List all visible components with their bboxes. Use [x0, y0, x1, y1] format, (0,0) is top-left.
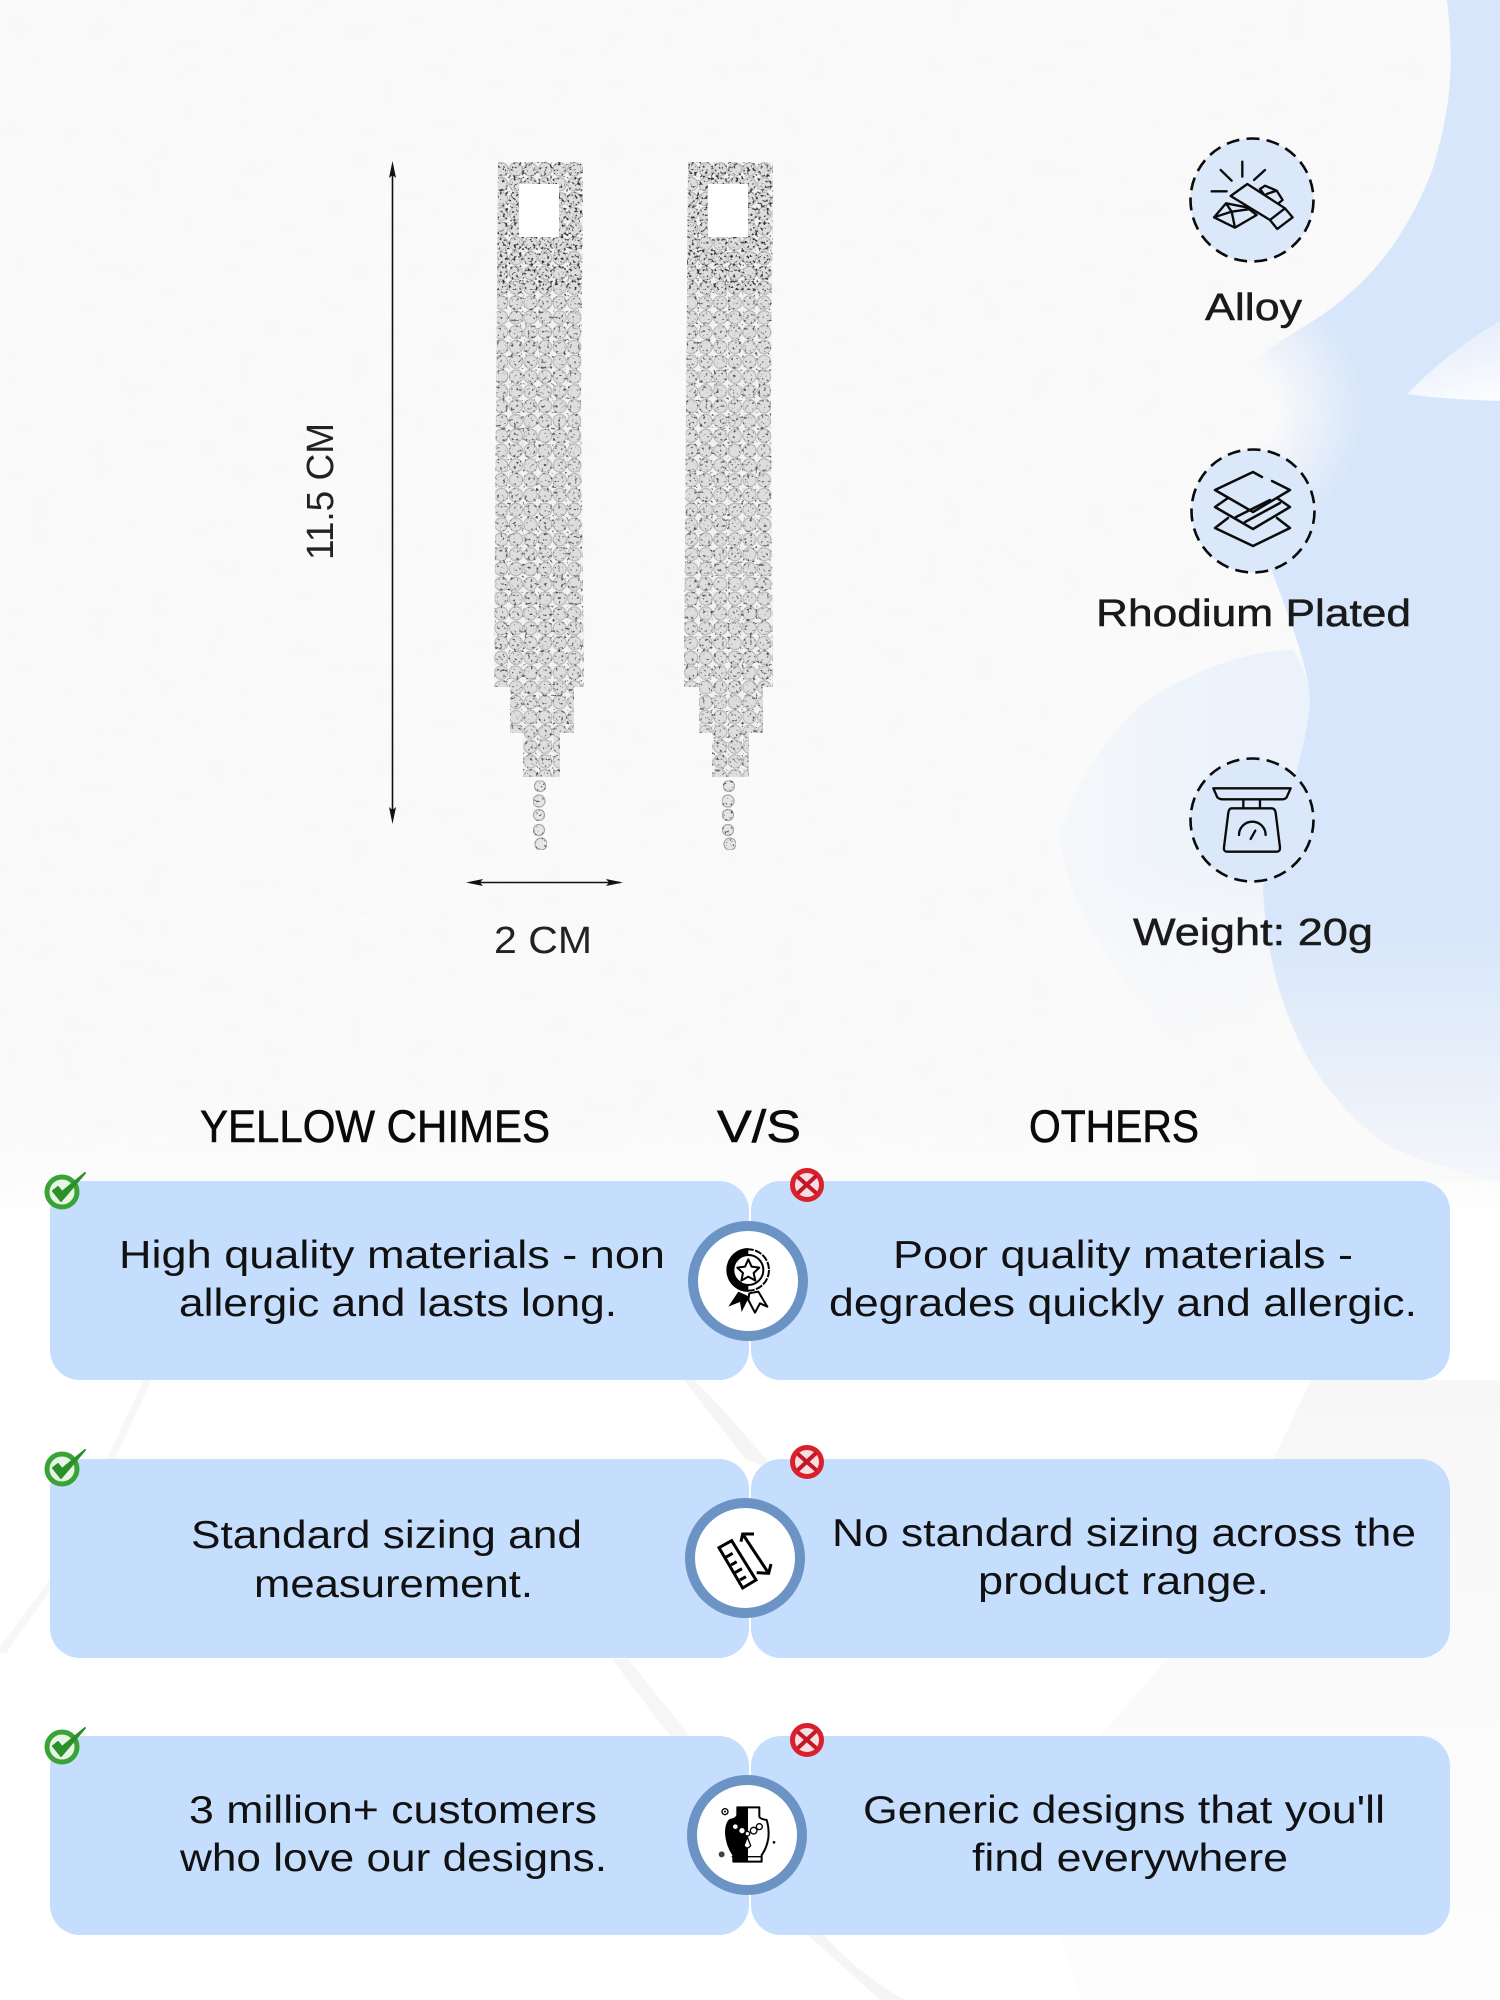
- panel: others quality: [751, 1181, 1450, 1380]
- comparison row 1: quality: [47, 1170, 1450, 1380]
- icon: layers: [1215, 472, 1290, 546]
- panel: others designs: [751, 1736, 1450, 1935]
- panel: yellow chimes sizing: [50, 1459, 749, 1658]
- text: yellow chimes customers: who love our designs.: [179, 1837, 607, 1880]
- text: yellow chimes quality: allergic and lasts long.: [179, 1282, 617, 1325]
- center badge: rosette: [693, 1226, 803, 1336]
- icon: necklace on bust: [719, 1807, 775, 1862]
- icon: ruler and arrow: [719, 1534, 771, 1588]
- text: yellow chimes sizing: measurement.: [254, 1563, 533, 1606]
- panel: yellow chimes quality: [50, 1181, 749, 1380]
- text: yellow chimes quality: High quality materials - non: [119, 1234, 665, 1277]
- icon: award rosette: [726, 1248, 770, 1313]
- panel: others sizing: [751, 1459, 1450, 1658]
- icon: gold bars: [1212, 162, 1293, 229]
- height arrow: [389, 161, 396, 824]
- width arrow: [466, 879, 623, 886]
- left earring: [494, 162, 584, 850]
- feature: alloy: [1190, 138, 1314, 329]
- width label: 2 CM: [494, 920, 592, 962]
- check icon: [47, 1450, 85, 1484]
- cross icon: [792, 1448, 822, 1476]
- check icon: [47, 1728, 85, 1762]
- panel: yellow chimes customers: [50, 1736, 749, 1935]
- text: yellow chimes customers: 3 million+ customers: [189, 1789, 597, 1832]
- feature: rhodium plated: [1096, 450, 1411, 635]
- text: yellow chimes sizing: Standard sizing and: [191, 1514, 582, 1557]
- text: others sizing: No standard sizing across the: [832, 1512, 1416, 1555]
- heading: yellow chimes: YELLOW CHIMES: [200, 1101, 550, 1152]
- feature: weight: [1133, 758, 1373, 954]
- comparison row 3: customers: [47, 1726, 1450, 1935]
- label: Rhodium Plated: [1096, 593, 1411, 635]
- heading: others: OTHERS: [1029, 1101, 1199, 1152]
- text: others designs: Generic designs that you'll: [863, 1789, 1385, 1832]
- heading: versus: V/S: [717, 1101, 801, 1152]
- height label: 11.5 CM: [300, 423, 342, 560]
- earring product photo: [494, 162, 773, 850]
- check icon: [47, 1173, 85, 1207]
- pale crescent: [1407, 321, 1500, 401]
- cross icon: [792, 1170, 822, 1200]
- comparison row 2: sizing: [47, 1448, 1450, 1658]
- icon: kitchen scale: [1213, 788, 1291, 852]
- text: others sizing: product range.: [978, 1560, 1269, 1603]
- label: Weight: 20g: [1133, 912, 1373, 954]
- text: others quality: degrades quickly and allergic.: [829, 1282, 1417, 1325]
- text: others quality: Poor quality materials -: [893, 1234, 1353, 1277]
- label: Alloy: [1205, 287, 1302, 329]
- center badge: necklace bust: [692, 1780, 802, 1890]
- text: others designs: find everywhere: [972, 1837, 1288, 1880]
- right earring: [684, 162, 773, 850]
- cross icon: [792, 1726, 822, 1754]
- center badge: ruler: [690, 1503, 800, 1613]
